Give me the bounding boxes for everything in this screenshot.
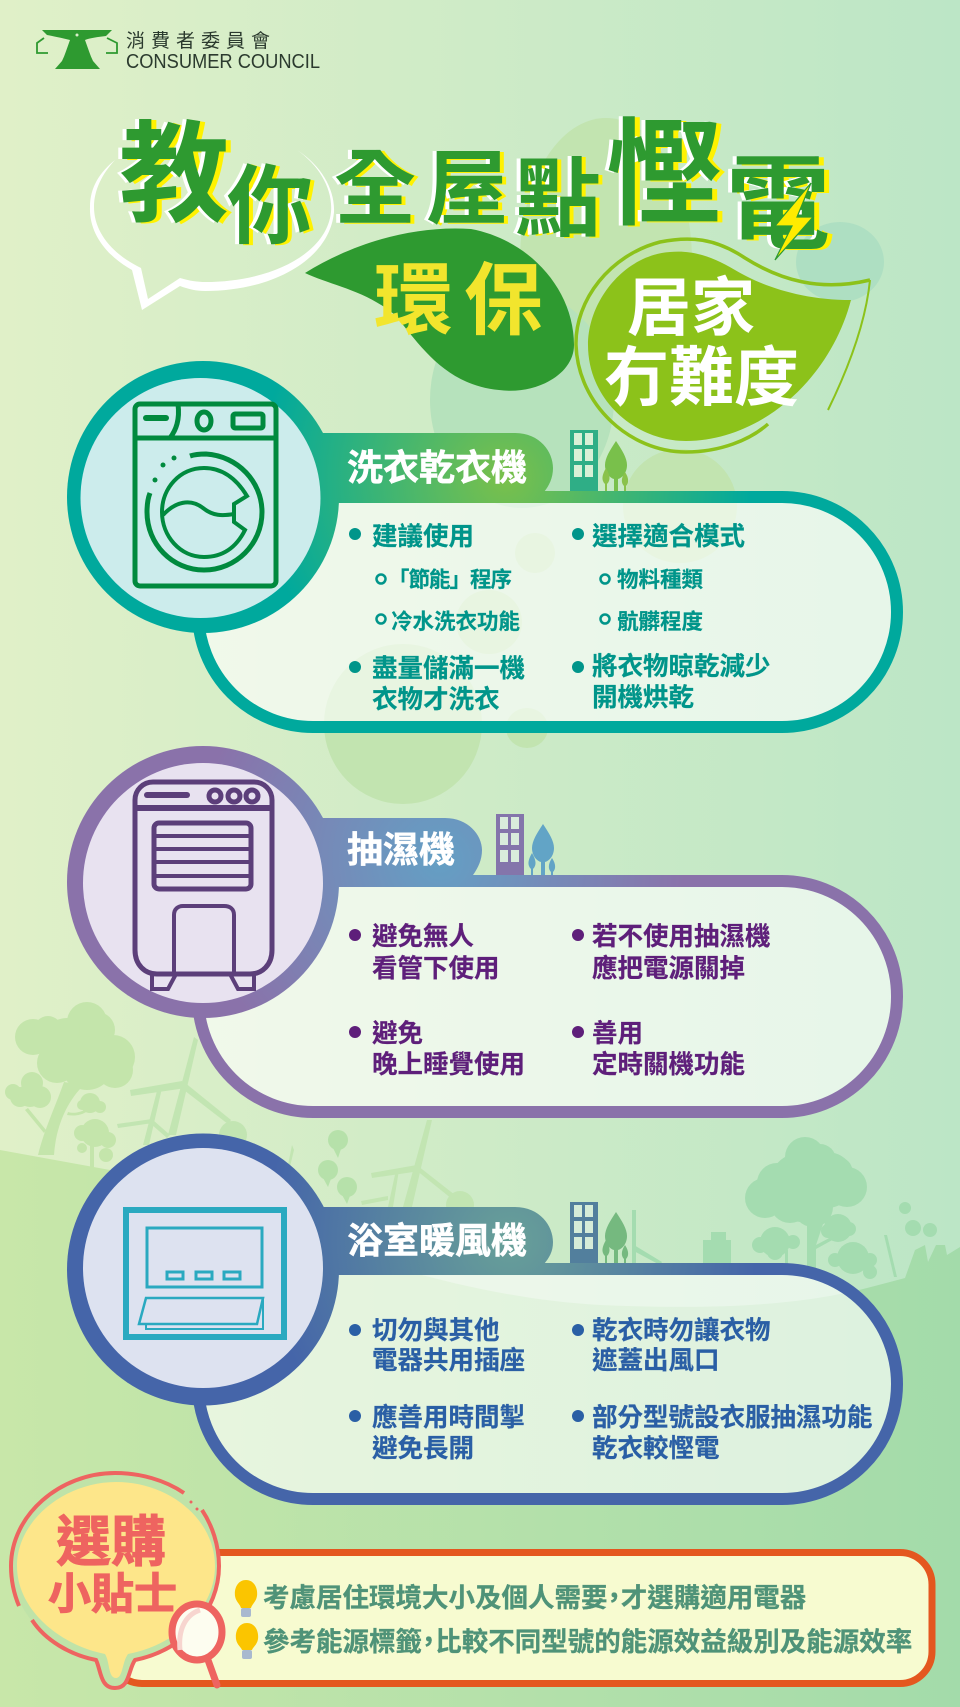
icon: building and trees [570,430,628,491]
heading tab: 洗衣乾衣機 [300,433,700,503]
logo name [126,30,320,73]
title: 點 [515,152,601,248]
logo name: 消費者委員會 [126,30,276,52]
icon: dehumidifier [135,782,272,989]
panel: buying tips [11,1473,932,1688]
tips bubble [11,1473,219,1688]
icon: building and trees [496,814,555,875]
icon: magnifying glass [172,1604,222,1685]
bullet list: washer dryer: 物料種類 [617,568,704,592]
bubble heading: 小貼士: 小貼士 [48,1571,177,1619]
icon: building and trees [570,1202,628,1263]
bullet list: bathroom heater: 應善用時間掣 [372,1403,525,1432]
bullet list: bathroom heater [349,1316,873,1463]
light green leaf [576,239,870,452]
icon: washing machine [135,404,276,586]
bullet list: washer dryer: 骯髒程度 [617,610,703,634]
bullet list: washer dryer [349,522,771,714]
title: 慳 [606,110,722,240]
bullet list: washer dryer: 建議使用 [372,523,474,551]
bullet list: dehumidifier: 晚上睡覺使用 [372,1051,525,1079]
bullet list: dehumidifier: 避免 [372,1020,423,1048]
bullet list: washer dryer: 將衣物晾乾減少 [592,653,771,681]
title: 電 [726,148,830,264]
bullet list: bathroom heater: 切勿與其他 [372,1317,500,1345]
icon: light bulb 2 [236,1623,258,1659]
title: 教 [119,114,229,237]
bullet list: dehumidifier: 避免無人 [372,922,474,951]
heading tab: 洗衣乾衣機: 洗衣乾衣機 [347,447,527,488]
panel: washer dryer [67,361,897,727]
bullet list: washer dryer: 「節能」程序 [388,568,512,592]
bullet list: bathroom heater: 部分型號設衣服抽濕功能 [592,1404,873,1432]
heading tab: 浴室暖風機 [300,1207,700,1275]
bullet list: washer dryer: 盡量儲滿一機 [372,655,525,683]
panel: dehumidifier [67,746,897,1112]
heading tab: 浴室暖風機: 浴室暖風機 [347,1220,527,1261]
tips text 1: 考慮居住環境大小及個人需要，才選購適用電器 [263,1583,806,1613]
title: 你 [227,159,313,255]
leaf text: 居家: 居家 [627,272,755,344]
bullet list: dehumidifier: 看管下使用 [372,955,500,983]
bullet list: bathroom heater: 遮蓋出風口 [592,1347,720,1375]
bullet list: washer dryer: 衣物才洗衣 [372,686,500,714]
bullet list: dehumidifier: 應把電源關掉 [592,954,745,983]
bullet list: washer dryer: 選擇適合模式 [592,522,745,551]
icon: wall heater [126,1210,284,1337]
speech bubble outline [90,150,334,310]
panel: bathroom heater [67,1134,897,1499]
icon: light bulb 1 [235,1580,257,1617]
title: 屋 [426,144,508,235]
bullet list: dehumidifier: 善用 [592,1020,643,1048]
leaf text: 冇難度: 冇難度 [604,341,799,414]
bullet list: bathroom heater: 乾衣較慳電 [592,1435,720,1463]
bullet list: washer dryer: 開機烘乾 [592,684,694,712]
dark green leaf [305,228,574,391]
bullet list: bathroom heater: 避免長開 [372,1435,474,1463]
bullet list: washer dryer: 冷水洗衣功能 [391,610,521,634]
bubble heading: 選購: 選購 [56,1511,166,1573]
leaf text: 環保: 環保 [374,256,554,345]
bullet list: bathroom heater: 電器共用插座 [372,1347,525,1375]
bullet list: bathroom heater: 乾衣時勿讓衣物 [592,1316,771,1345]
bullet list: dehumidifier [349,922,771,1079]
title [117,110,832,264]
logo name: CONSUMER COUNCIL [126,51,320,73]
logo emblem [37,30,117,69]
bullet list: dehumidifier: 定時關機功能 [592,1051,745,1079]
tips text 2: 參考能源標籤，比較不同型號的能源效益級別及能源效率 [263,1627,912,1657]
heading tab: 抽濕機: 抽濕機 [347,829,455,870]
heading tab: 抽濕機 [300,818,700,887]
title: 全 [334,144,416,235]
bullet list: dehumidifier: 若不使用抽濕機 [592,923,771,951]
